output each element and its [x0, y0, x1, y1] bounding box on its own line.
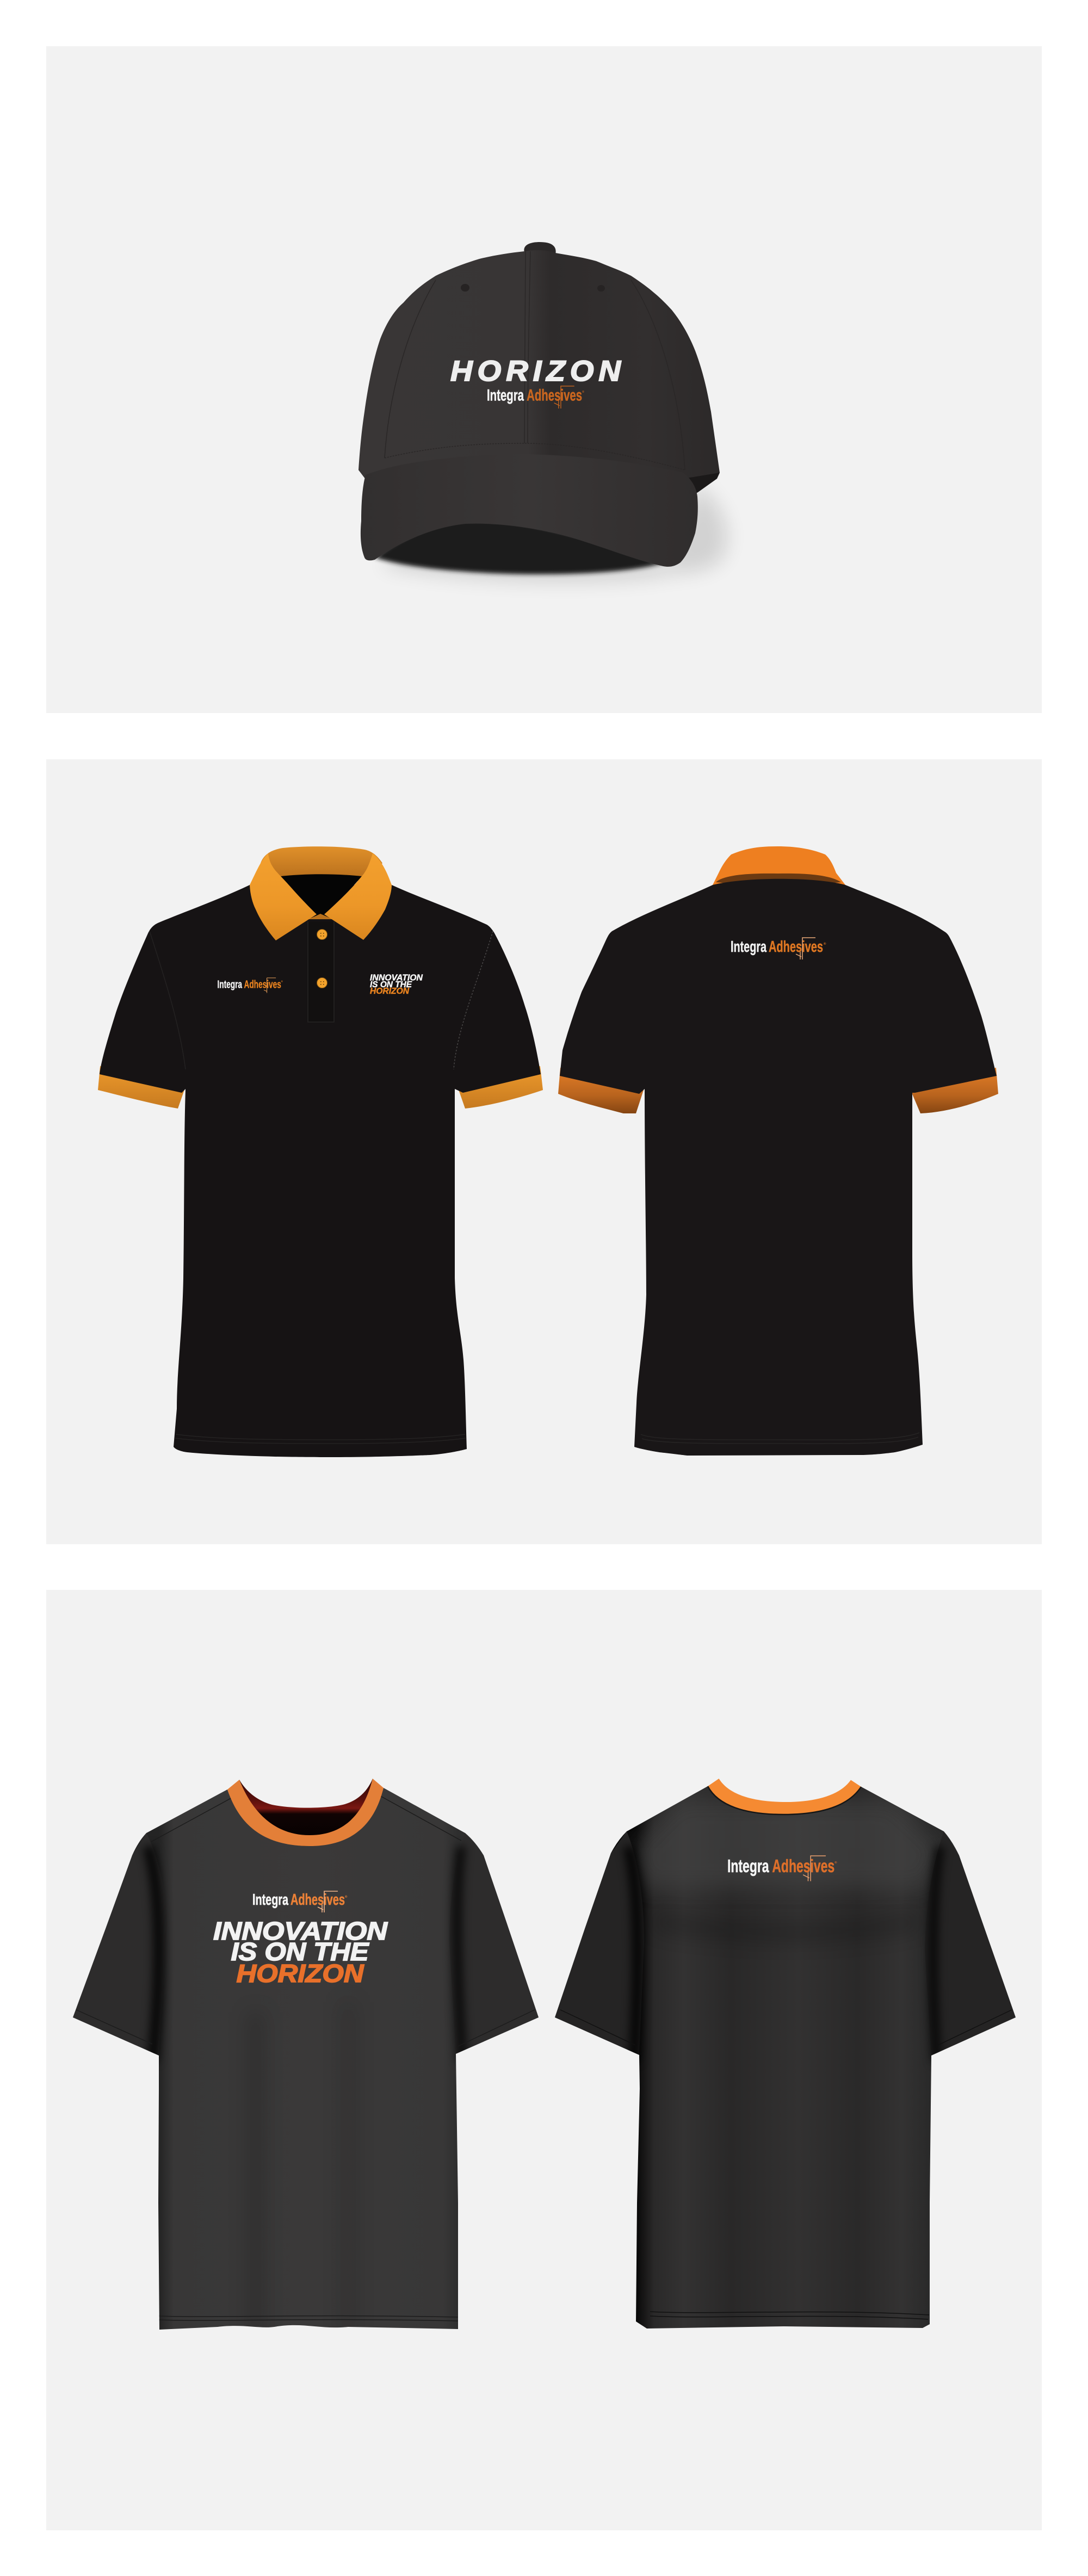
polo back collar — [713, 846, 845, 885]
polo front logo — [218, 978, 283, 993]
t-shirt front logo: Integra — [252, 1891, 289, 1909]
polo front cuffs — [98, 1066, 543, 1109]
polo front logo: Adhesives — [244, 978, 281, 990]
polo front neck opening — [281, 874, 362, 919]
polo front collar flaps — [250, 853, 392, 940]
polo back logo: Integra — [731, 938, 767, 956]
cap logo: Integra — [487, 387, 524, 405]
t-shirt front slogan: INNOVATION — [213, 1917, 388, 1945]
cap crown — [358, 250, 720, 479]
polo front slogan: IS ON THE — [370, 980, 412, 989]
t-shirt back logo: Adhesives — [772, 1856, 834, 1877]
cap product — [358, 242, 720, 574]
polo front — [98, 846, 543, 1457]
cap button — [524, 242, 556, 255]
polo back body — [560, 879, 997, 1456]
polo front buttons — [317, 929, 327, 988]
cap underbrim — [375, 519, 663, 574]
polo front slogan: HORIZON — [370, 987, 410, 996]
t-shirt back shading — [555, 1800, 1016, 2319]
t-shirt front collar — [227, 1779, 384, 1846]
cap logo: Adhesives — [527, 387, 582, 405]
t-shirt back — [555, 1779, 1016, 2329]
t-shirt front slogan — [213, 1917, 388, 1987]
polo back — [558, 846, 998, 1456]
t-shirt back logo: Integra — [727, 1856, 769, 1877]
polo front slogan: INNOVATION — [370, 974, 423, 982]
t-shirt front slogan: HORIZON — [236, 1959, 364, 1987]
cap HORIZON wordmark: HORIZON — [450, 355, 622, 387]
t-shirt front sleeves — [73, 1833, 539, 2055]
cap back strap — [358, 468, 720, 506]
cap logo: ® — [582, 390, 584, 394]
polo back hem lines — [641, 1433, 919, 1444]
polo back logo: Adhesives — [769, 938, 823, 956]
polo front logo: ® — [281, 980, 283, 983]
cap logo — [487, 386, 584, 408]
t-shirt back logo — [727, 1856, 837, 1881]
polo front collar band — [261, 846, 382, 881]
cap cast shadow — [381, 484, 727, 581]
t-shirt back body — [555, 1786, 1016, 2329]
t-shirt back logo: ® — [834, 1861, 837, 1865]
polo back collar shadow — [716, 874, 841, 888]
panel: t-shirts — [46, 1590, 1042, 2530]
polo front seams — [150, 931, 493, 1444]
cap brim — [361, 454, 698, 567]
t-shirt back collar — [708, 1779, 861, 1815]
t-shirt front — [73, 1779, 539, 2339]
t-shirt front neck interior — [227, 1779, 384, 1849]
polo back cuffs — [558, 1068, 998, 1113]
panel: cap — [46, 46, 1042, 713]
t-shirt front shading — [73, 1794, 539, 2339]
cap eyelets — [461, 284, 605, 292]
polo front slogan — [370, 974, 423, 996]
polo back logo — [731, 938, 826, 959]
polo front body — [100, 885, 541, 1457]
t-shirt front logo — [252, 1891, 348, 1912]
t-shirt front logo: Adhesives — [290, 1891, 345, 1909]
t-shirt front logo: ® — [345, 1895, 348, 1899]
polo front under collar — [308, 914, 333, 919]
panel: polo shirts — [46, 759, 1042, 1544]
t-shirt front slogan: IS ON THE — [231, 1937, 369, 1966]
polo back logo: ® — [824, 942, 826, 946]
t-shirt front body — [73, 1788, 539, 2330]
polo front logo: Integra — [218, 978, 242, 990]
t-shirt back sleeves — [555, 1831, 1016, 2055]
polo front placket — [308, 921, 334, 1022]
cap seams — [385, 251, 685, 470]
t-shirt back collar piping — [708, 1786, 861, 1815]
